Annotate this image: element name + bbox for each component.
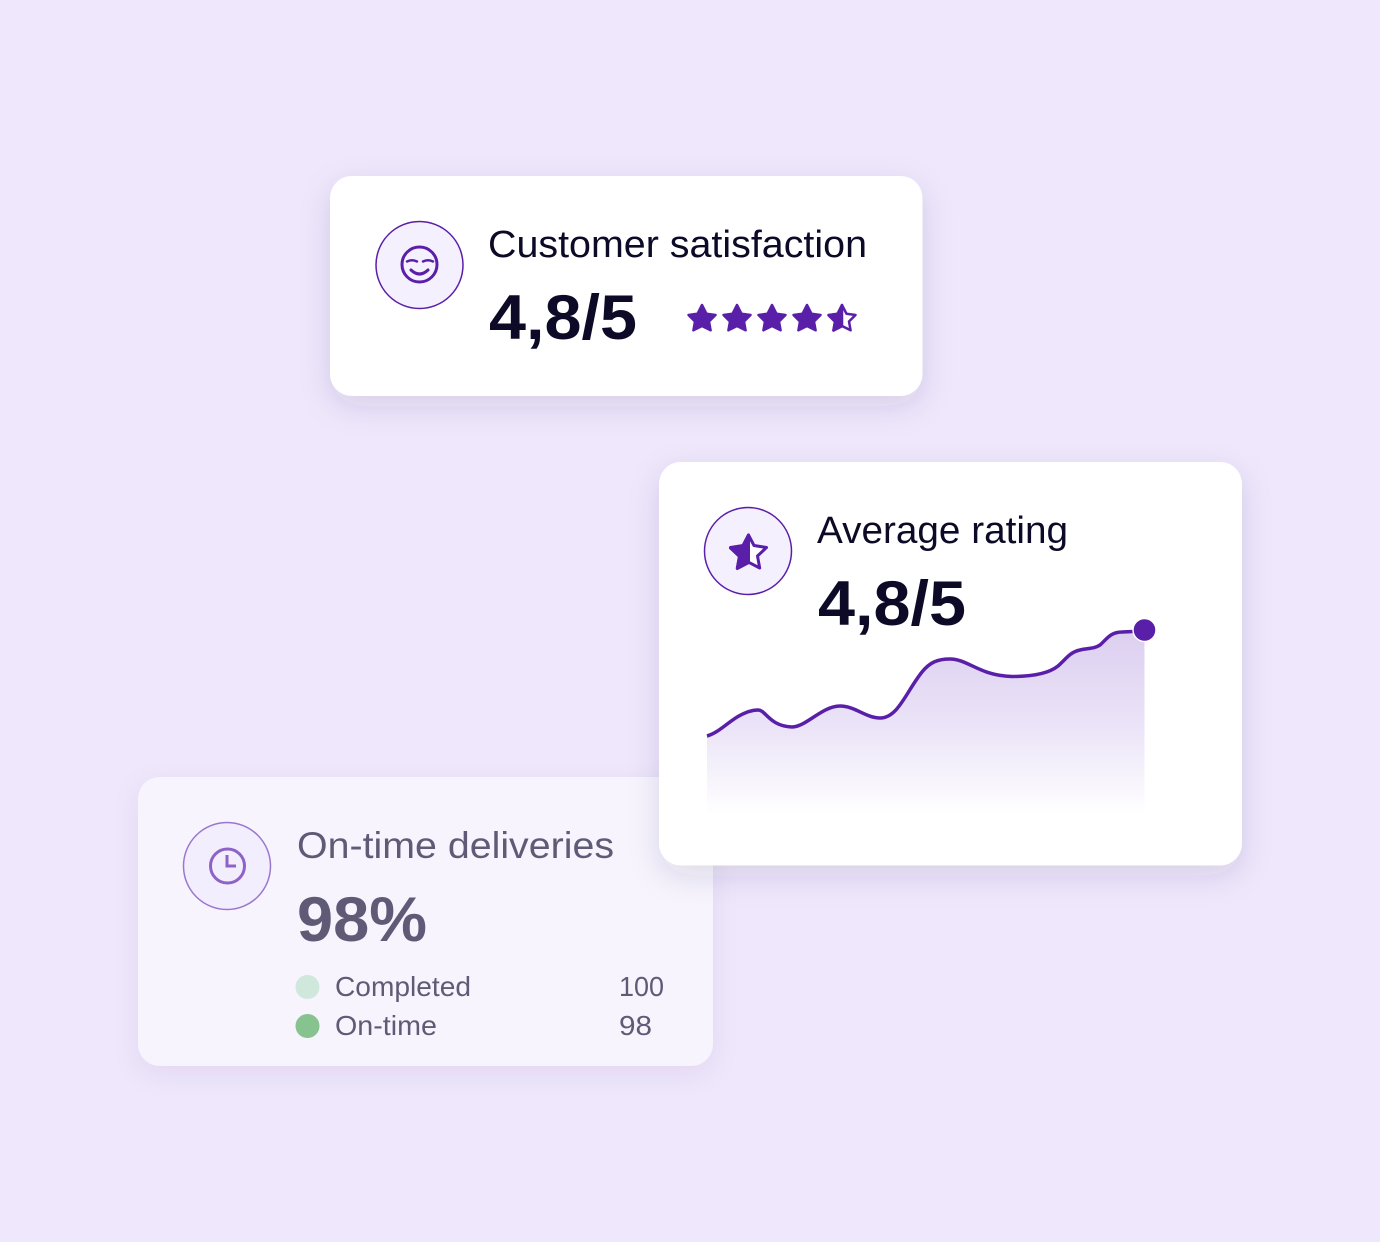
rating stars: [688, 305, 856, 331]
value: 4,8/5: 4,8/5: [489, 283, 637, 353]
heading: on-time deliveries: On-time deliveries: [297, 825, 614, 866]
heading: average rating: Average rating: [817, 510, 1068, 552]
legend: on-time: 98: [619, 1010, 652, 1041]
legend: on-time: On-time: [335, 1010, 437, 1041]
icon: clock: [184, 822, 270, 910]
legend: completed: 100: [619, 971, 664, 1002]
legend: completed: [296, 971, 664, 1002]
icon: half star: [704, 508, 792, 594]
panel: on-time deliveries: [138, 777, 713, 1066]
panel: average rating: [659, 462, 1242, 866]
legend: completed: Completed: [335, 971, 471, 1002]
heading: customer satisfaction: Customer satisfaction: [488, 224, 867, 266]
icon: smiley: [376, 222, 463, 308]
value: 4,8/5: 4,8/5: [818, 569, 966, 639]
value: 98%: 98%: [297, 885, 427, 955]
line chart: [707, 618, 1156, 815]
legend: on-time: [296, 1010, 652, 1041]
panel: customer satisfaction: [330, 176, 922, 396]
